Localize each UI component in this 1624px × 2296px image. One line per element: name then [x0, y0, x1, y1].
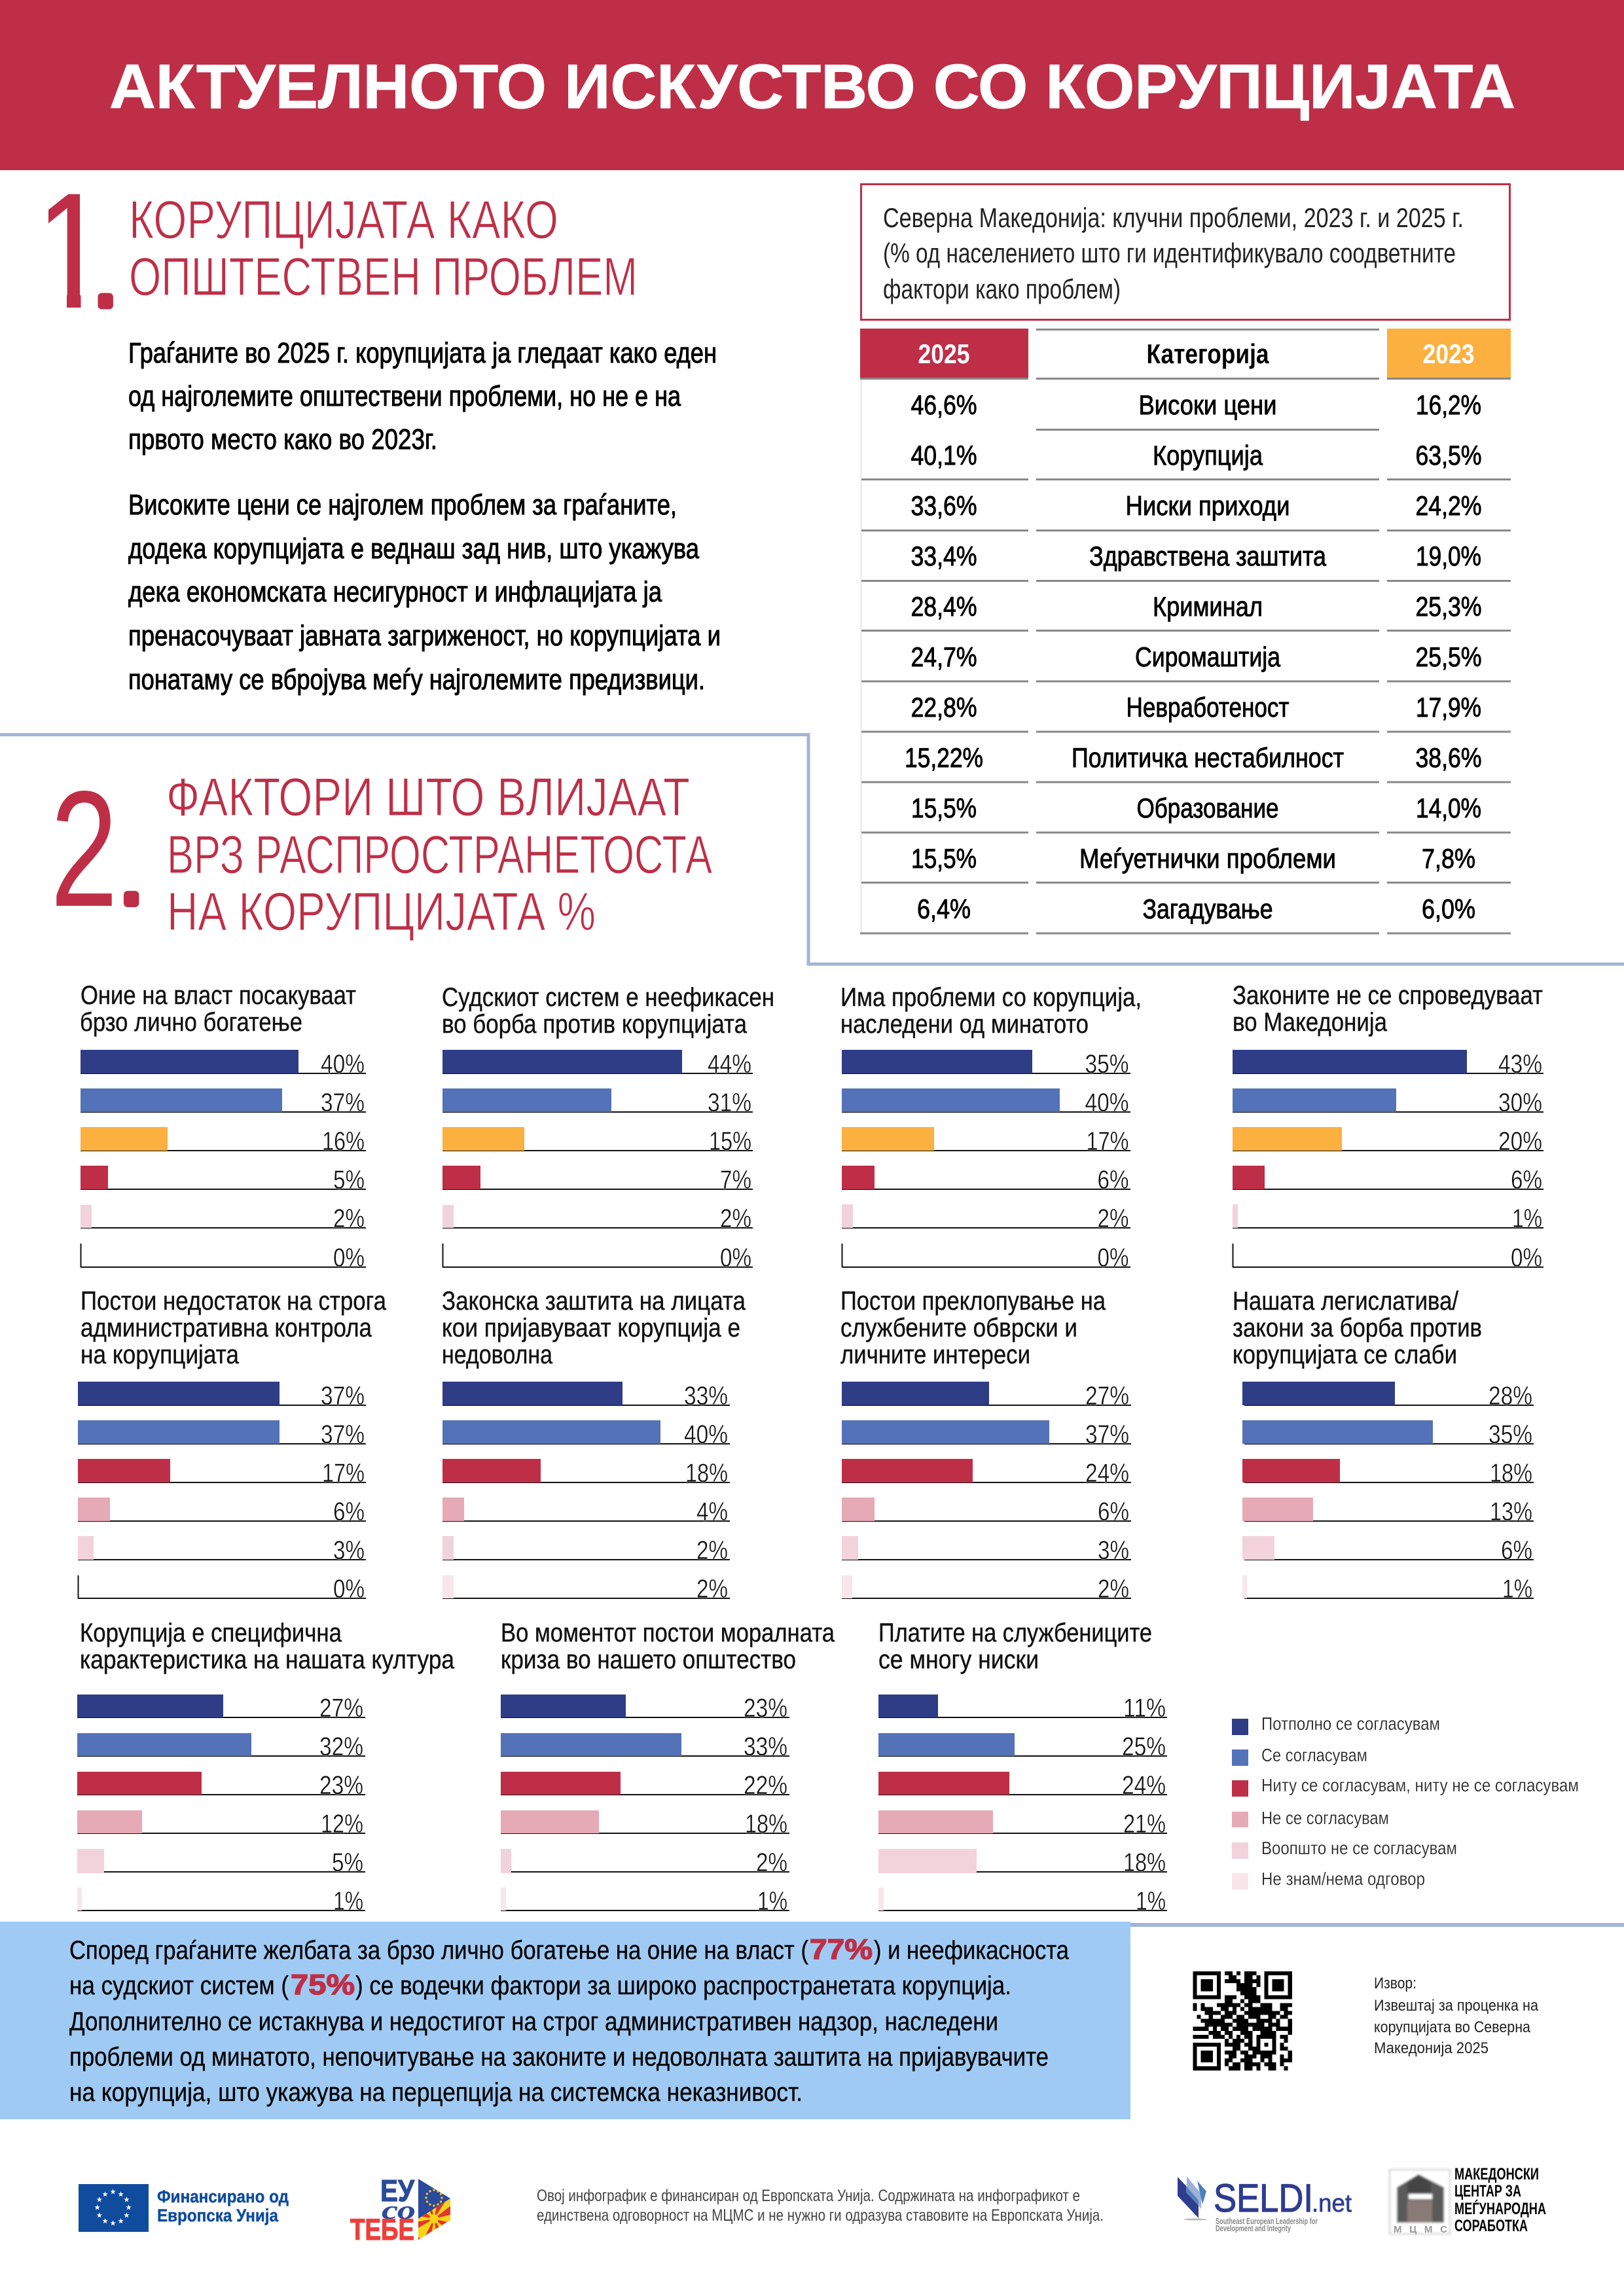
section 2 heading: НА КОРУПЦИЈАТА %	[167, 881, 596, 942]
conclusion callout: проблеми од минатото, непочитување на законите и недоволната заштита на пријавувачите	[69, 2043, 1049, 2072]
header banner	[0, 0, 1624, 170]
conclusion callout: Според граѓаните желбата за брзо лично богатење на оние на власт (	[69, 1936, 809, 1965]
values: 0%	[1097, 1244, 1128, 1272]
values: 30%	[1498, 1088, 1542, 1117]
table column 2023: 24,2%	[1415, 490, 1482, 521]
source note	[1374, 1975, 1539, 2057]
table column 2023: 25,5%	[1415, 641, 1482, 672]
conclusion callout: 75%	[291, 1969, 355, 2001]
logo: MCIC: МЕЃУНАРОДНА	[1454, 2199, 1546, 2218]
values: 4%	[696, 1498, 728, 1526]
chart title: закони за борба против	[1233, 1314, 1482, 1342]
values: 18%	[1123, 1848, 1166, 1877]
table column category: Криминал	[1153, 591, 1263, 622]
section 1 heading: ОПШТЕСТВЕН ПРОБЛЕМ	[129, 246, 638, 307]
table caption box: (% од населението што ги идентификувало соодветните	[883, 238, 1456, 268]
logo: SELDI.net: .net	[1312, 2190, 1352, 2217]
values: 24%	[1122, 1771, 1166, 1800]
values: 3%	[333, 1536, 365, 1565]
table column 2023: 63,5%	[1415, 440, 1482, 471]
values: 35%	[1489, 1420, 1532, 1449]
values: 24%	[1085, 1459, 1129, 1488]
legend: Се согласувам	[1261, 1745, 1367, 1765]
values: 23%	[744, 1694, 787, 1723]
logo: EU with you: ЕУ	[380, 2174, 415, 2208]
values: 40%	[684, 1420, 728, 1449]
section 1 text block: понатаму се вбројува меѓу најголемите предизвици.	[128, 664, 705, 696]
section 1 text block: од најголемите општествени проблеми, но не е на	[128, 380, 681, 412]
table column 2023	[1415, 389, 1482, 924]
conclusion callout: ) се водечки фактори за широко распространетата корупција.	[355, 1971, 1011, 2000]
bars	[78, 1382, 280, 1560]
chart title	[1233, 1287, 1482, 1369]
values: 27%	[319, 1694, 363, 1723]
values: 18%	[685, 1459, 728, 1488]
logo: MCIC: МЦМС	[1394, 2224, 1447, 2235]
section 2 heading: ВРЗ РАСПРОСТРАНЕТОСТА	[167, 824, 712, 885]
values: 2%	[756, 1848, 787, 1877]
table column 2025: 15,5%	[911, 793, 977, 823]
table column category: Ниски приходи	[1126, 490, 1290, 521]
chart title: Постои недостаток на строга	[81, 1287, 387, 1316]
chart title: наследени од минатото	[840, 1010, 1089, 1039]
source note: Македонија 2025	[1374, 2039, 1489, 2057]
logo: EU with you: ТЕБЕ	[350, 2213, 414, 2246]
legend	[1232, 1713, 1579, 1890]
values: 1%	[1512, 1204, 1542, 1233]
chart: inefficient judiciary	[442, 983, 774, 1272]
values: 35%	[1085, 1050, 1128, 1079]
values: 40%	[321, 1050, 365, 1079]
values: 37%	[321, 1382, 365, 1410]
chart: specific characteristic of culture	[77, 1619, 455, 1916]
chart title	[840, 1287, 1106, 1369]
logo: SELDI.net: SELDI	[1214, 2176, 1313, 2220]
table column category: Здравствена заштита	[1089, 541, 1327, 571]
table column 2023: 16,2%	[1416, 389, 1481, 420]
table column 2025: 22,8%	[911, 692, 977, 723]
chart title	[442, 983, 774, 1039]
values: 2%	[333, 1204, 365, 1233]
values	[1122, 1694, 1166, 1916]
bars	[842, 1050, 1060, 1228]
chart: whistleblower protection	[442, 1287, 746, 1604]
chart title: брзо лично богатење	[80, 1008, 302, 1037]
table column category: Загадување	[1143, 893, 1272, 924]
chart: laws not enforced	[1233, 981, 1543, 1272]
section 1 text block: Високите цени се најголем проблем за граѓаните,	[128, 489, 677, 521]
values	[319, 1694, 363, 1916]
values: 43%	[1498, 1050, 1542, 1079]
bars	[1242, 1382, 1433, 1598]
logo: funded by the European Union	[79, 2184, 289, 2232]
values: 11%	[1123, 1694, 1166, 1723]
chart title	[1233, 981, 1543, 1037]
source note: Извештај за проценка на	[1374, 1997, 1539, 2015]
bars	[442, 1050, 682, 1228]
values: 22%	[744, 1771, 787, 1800]
chart title: на корупцијата	[81, 1340, 240, 1369]
values: 12%	[321, 1810, 363, 1839]
table: key problems 2023 and 2025	[860, 329, 1511, 933]
values	[1498, 1050, 1542, 1272]
values: 28%	[1489, 1382, 1532, 1410]
values: 6%	[1511, 1166, 1542, 1194]
chart title: во Македонија	[1233, 1008, 1388, 1037]
table column 2023: 6,0%	[1422, 893, 1475, 924]
chart title: Нашата легислатива/	[1233, 1287, 1459, 1316]
values	[1085, 1382, 1129, 1604]
logo: SELDI.net: Development and Integrity	[1216, 2223, 1291, 2233]
table column category	[1072, 389, 1344, 924]
values: 21%	[1123, 1810, 1166, 1839]
table column 2025: 15,5%	[911, 843, 977, 874]
table column category: Образование	[1136, 793, 1279, 823]
values	[1489, 1382, 1532, 1604]
values: 15%	[709, 1127, 751, 1156]
chart title: недоволна	[442, 1340, 553, 1369]
section 1 text block: додека корупцијата е веднаш зад нив, што укажува	[128, 533, 699, 565]
values: 27%	[1085, 1382, 1129, 1410]
chart title: личните интереси	[840, 1340, 1030, 1369]
values: 32%	[319, 1732, 363, 1761]
bars	[501, 1695, 681, 1910]
values: 17%	[1087, 1127, 1128, 1156]
values: 5%	[332, 1848, 363, 1877]
chart: weak anti-corruption legislation	[1233, 1287, 1534, 1604]
chart title	[878, 1619, 1152, 1674]
icon: QR code	[1193, 1971, 1292, 2070]
chart title: Оние на власт посакуваат	[81, 981, 356, 1010]
values: 2%	[1097, 1204, 1128, 1233]
table header row: 2023	[1423, 338, 1474, 369]
table column 2023: 14,0%	[1416, 793, 1481, 823]
values: 16%	[322, 1127, 365, 1156]
conclusion callout: 77%	[810, 1933, 873, 1965]
values: 0%	[1511, 1244, 1542, 1272]
conclusion callout	[0, 1922, 1130, 2119]
table column category: Меѓуетнички проблеми	[1079, 843, 1336, 874]
chart title: Платите на службениците	[878, 1619, 1152, 1647]
chart title: административна контрола	[81, 1314, 372, 1342]
section 1 text block: првото место како во 2023г.	[128, 423, 437, 456]
chart title: Законска заштита на лицата	[442, 1287, 746, 1316]
values	[684, 1382, 728, 1604]
chart title	[442, 1287, 746, 1369]
logo: MCIC	[1390, 2165, 1546, 2235]
legend: Воопшто не се согласувам	[1261, 1838, 1457, 1858]
chart title	[81, 1287, 387, 1369]
table column 2025: 40,1%	[911, 440, 977, 471]
values: 0%	[333, 1575, 365, 1604]
table caption box: фактори како проблем)	[883, 274, 1121, 304]
values: 6%	[1097, 1166, 1128, 1194]
table column category: Сиромаштија	[1135, 641, 1281, 672]
values: 37%	[1085, 1420, 1129, 1449]
table column category: Невработеност	[1126, 692, 1290, 723]
bars	[1233, 1050, 1467, 1228]
section 1 text block	[128, 337, 721, 696]
chart title: службените обврски и	[840, 1314, 1077, 1342]
conclusion callout: на корупција, што укажува на перцепција на системска неказнивост.	[69, 2078, 803, 2107]
table column category: Корупција	[1153, 440, 1263, 471]
logo: MCIC: СОРАБОТКА	[1454, 2217, 1528, 2235]
values: 5%	[333, 1166, 365, 1194]
values: 3%	[1098, 1536, 1129, 1565]
table column 2023: 38,6%	[1415, 742, 1482, 773]
title: АКТУЕЛНОТО ИСКУСТВО СО КОРУПЦИЈАТА	[109, 52, 1515, 122]
values	[744, 1694, 787, 1916]
logo: funded by the European Union: Финансирано од	[157, 2187, 289, 2206]
bars	[442, 1382, 660, 1598]
chart: moral crisis	[501, 1619, 835, 1916]
logo: SELDI.net	[1178, 2176, 1352, 2233]
chart title: кои пријавуваат корупција е	[442, 1314, 740, 1342]
table caption box	[861, 185, 1509, 319]
table column 2025: 6,4%	[917, 893, 971, 924]
table column 2025: 28,4%	[911, 591, 977, 622]
chart: low salaries of officials	[878, 1619, 1167, 1916]
values: 25%	[1122, 1732, 1166, 1761]
legend: Ниту се согласувам, ниту не се согласувам	[1261, 1775, 1579, 1795]
section 2 heading	[166, 766, 712, 942]
values: 1%	[1136, 1887, 1166, 1916]
values: 23%	[319, 1771, 363, 1800]
values: 2%	[720, 1204, 751, 1233]
values: 0%	[720, 1244, 751, 1272]
table column category: Високи цени	[1139, 389, 1276, 420]
chart title	[840, 983, 1142, 1039]
values: 2%	[1098, 1575, 1129, 1604]
logo: MCIC: ЦЕНТАР ЗА	[1454, 2182, 1521, 2200]
chart title	[80, 981, 356, 1037]
chart title: Има проблеми со корупција,	[840, 983, 1142, 1012]
table column 2025: 46,6%	[911, 389, 977, 420]
legend: Потполно се согласувам	[1261, 1713, 1440, 1734]
section 2 heading: ФАКТОРИ ШТО ВЛИЈААТ	[166, 766, 690, 827]
chart title	[501, 1619, 835, 1674]
logo: EU with you: со	[382, 2195, 416, 2225]
values: 37%	[321, 1420, 365, 1449]
values: 6%	[1501, 1536, 1532, 1565]
bars	[842, 1382, 1049, 1598]
chart title: Корупција е специфична	[80, 1619, 342, 1647]
chart title: Во моментот постои моралната	[501, 1619, 835, 1647]
chart title: се многу ниски	[878, 1645, 1039, 1674]
table column 2023: 7,8%	[1422, 843, 1475, 874]
values: 37%	[321, 1088, 365, 1117]
table header row: 2025	[918, 338, 970, 369]
section 2 number: 2	[50, 757, 118, 941]
values: 1%	[1502, 1575, 1532, 1604]
source note: Извор:	[1374, 1975, 1416, 1992]
table column 2023: 19,0%	[1416, 541, 1481, 571]
values: 40%	[1085, 1088, 1128, 1117]
values	[708, 1050, 751, 1272]
values: 13%	[1490, 1498, 1532, 1526]
bars	[81, 1050, 298, 1228]
chart: rapid personal enrichment	[80, 981, 366, 1272]
section 1 text block: Граѓаните во 2025 г. корупцијата ја гледаат како еден	[128, 337, 717, 369]
funding disclaimer	[537, 2187, 1104, 2225]
values: 20%	[1498, 1127, 1542, 1156]
values: 31%	[708, 1088, 751, 1117]
logo: EU with you	[350, 2179, 450, 2240]
table caption box: Северна Македонија: клучни проблеми, 2023 г. и 2025 г.	[883, 202, 1464, 233]
bars	[77, 1695, 251, 1910]
table column category: Политичка нестабилност	[1072, 742, 1344, 773]
section 1 heading: КОРУПЦИЈАТА КАКО	[129, 189, 558, 250]
chart title: карактеристика на нашата култура	[80, 1645, 455, 1674]
section 1 text block: пренасочуваат јавната загриженост, но корупцијата и	[128, 620, 721, 652]
logo: MCIC: МАКЕДОНСКИ	[1454, 2165, 1539, 2183]
chart title: криза во нашето општество	[501, 1645, 796, 1674]
funding disclaimer: единствена одговорност на МЦМС и не нужно ги одразува ставовите на Европската Унија.	[537, 2206, 1104, 2225]
legend: Не се согласувам	[1261, 1808, 1389, 1828]
values	[321, 1382, 365, 1604]
section 2 number: .	[120, 833, 142, 920]
chart title: Постои преклопување на	[840, 1287, 1106, 1316]
values	[321, 1050, 365, 1272]
values: 6%	[1098, 1498, 1129, 1526]
legend: Не знам/нема одговор	[1261, 1869, 1425, 1889]
logo: funded by the European Union: Европска Унија	[157, 2206, 279, 2225]
chart: lack of strict administrative control	[78, 1287, 387, 1604]
chart title: во борба против корупцијата	[442, 1010, 748, 1039]
conclusion callout: Дополнително се истакнува и недостигот на строг административен надзор, наследени	[69, 2007, 998, 2036]
section 1 text block: дека економската несигурност и инфлацијата ја	[128, 576, 662, 608]
values: 33%	[684, 1382, 728, 1410]
bars	[878, 1695, 1015, 1910]
funding disclaimer: Овој инфографик е финансиран од Европската Унија. Содржината на инфографикот е	[537, 2187, 1080, 2205]
chart: overlap of duties and personal interests	[840, 1287, 1131, 1604]
section 1 heading	[129, 189, 638, 307]
section 1 number: 1	[31, 159, 111, 343]
section 1 number: .	[94, 234, 117, 322]
values: 17%	[322, 1459, 365, 1488]
chart title	[80, 1619, 455, 1674]
conclusion callout: на судскиот систем (	[69, 1971, 289, 2000]
table column 2025: 24,7%	[911, 641, 977, 672]
table header row	[918, 338, 1474, 369]
section 1 number	[48, 194, 113, 309]
table column 2023: 25,3%	[1415, 591, 1482, 622]
values: 6%	[333, 1498, 365, 1526]
values: 1%	[757, 1887, 787, 1916]
values: 44%	[708, 1050, 751, 1079]
table column 2025	[905, 389, 983, 924]
values: 0%	[333, 1244, 365, 1272]
values: 18%	[745, 1810, 787, 1839]
chart title: Законите не се спроведуваат	[1233, 981, 1543, 1010]
values: 2%	[696, 1536, 728, 1565]
chart title: корупцијата се слаби	[1233, 1340, 1457, 1369]
table column 2025: 15,22%	[905, 742, 983, 773]
values: 2%	[696, 1575, 728, 1604]
table column 2023: 17,9%	[1416, 692, 1481, 723]
values: 33%	[744, 1732, 787, 1761]
chart title: Судскиот систем е неефикасен	[442, 983, 774, 1012]
table column 2025: 33,6%	[911, 490, 977, 521]
values	[1085, 1050, 1128, 1272]
table header row: Категорија	[1147, 338, 1269, 369]
source note: корупцијата во Северна	[1374, 2018, 1531, 2036]
logo: SELDI.net: Southeast European Leadership for	[1216, 2216, 1318, 2226]
values: 18%	[1490, 1459, 1532, 1488]
chart: inherited problems	[840, 983, 1142, 1272]
conclusion callout: ) и неефикасноста	[874, 1936, 1070, 1965]
values: 1%	[333, 1887, 363, 1916]
table column 2025: 33,4%	[911, 541, 977, 571]
values: 7%	[720, 1166, 751, 1194]
